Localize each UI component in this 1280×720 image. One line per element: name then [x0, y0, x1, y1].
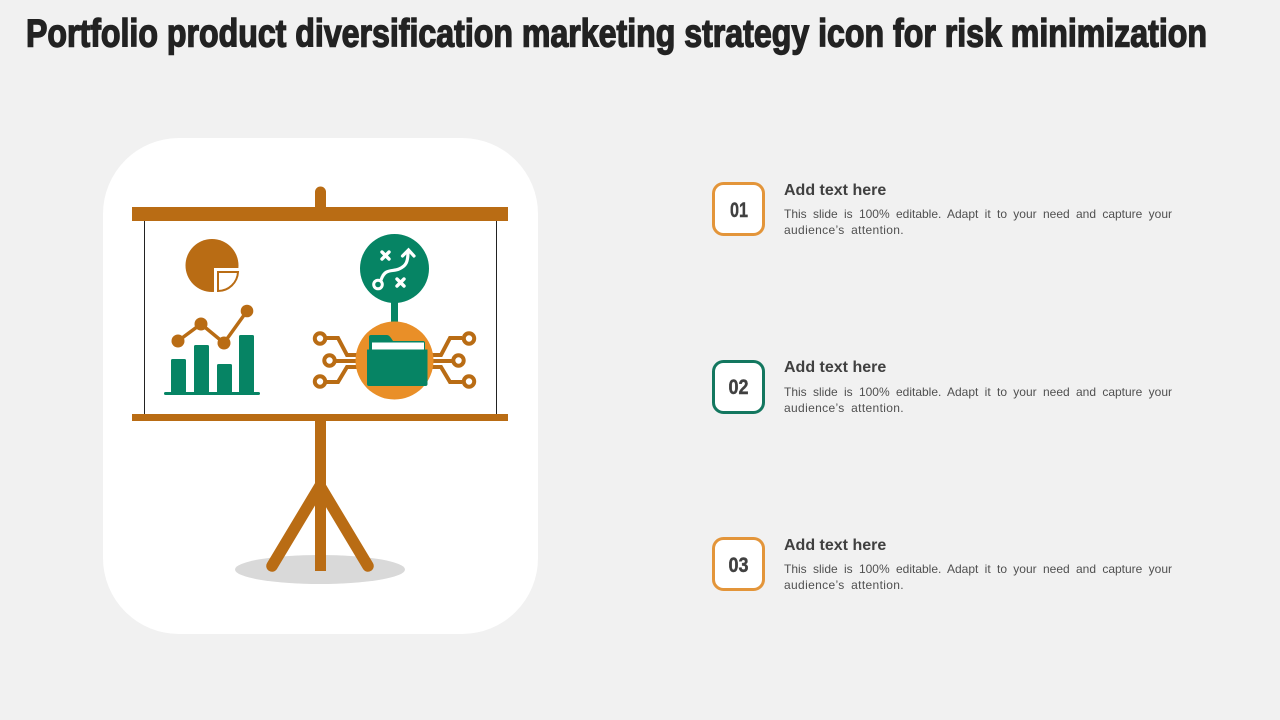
body 02: This slide is 100% editable. Adapt it to your need and capture your	[784, 385, 1172, 399]
heading 02: Add text here	[784, 359, 886, 376]
badge 03	[714, 538, 764, 590]
badge 01	[714, 184, 764, 234]
white rounded backdrop	[103, 138, 538, 634]
icon: circuit connectors	[315, 333, 474, 387]
badge 02: 02	[728, 376, 748, 399]
heading 01: Add text here	[784, 182, 886, 199]
icon: pie chart	[186, 239, 242, 296]
body 01	[784, 206, 1173, 238]
badge 01: 01	[730, 199, 748, 222]
easel stand	[272, 421, 368, 571]
item 01	[714, 182, 1173, 238]
badge 03: 03	[728, 554, 748, 577]
item 03	[714, 537, 1173, 593]
item 02	[714, 359, 1173, 416]
icon: folder in orange circle	[356, 322, 434, 400]
body 03: This slide is 100% editable. Adapt it to your need and capture your	[784, 562, 1172, 576]
body 02	[784, 384, 1173, 416]
body 03	[784, 561, 1173, 593]
heading 03: Add text here	[784, 537, 886, 554]
badge 02	[714, 362, 764, 412]
panel: presentation board illustration	[103, 138, 538, 634]
body 01: audience’s attention.	[784, 223, 904, 237]
easel shadow	[235, 555, 405, 584]
body 02: audience’s attention.	[784, 401, 904, 415]
chart: bars with trend line	[164, 305, 260, 395]
projection screen	[132, 186, 508, 421]
icon: strategy circle	[360, 234, 429, 326]
body 03: audience’s attention.	[784, 578, 904, 592]
body 01: This slide is 100% editable. Adapt it to your need and capture your	[784, 207, 1172, 221]
